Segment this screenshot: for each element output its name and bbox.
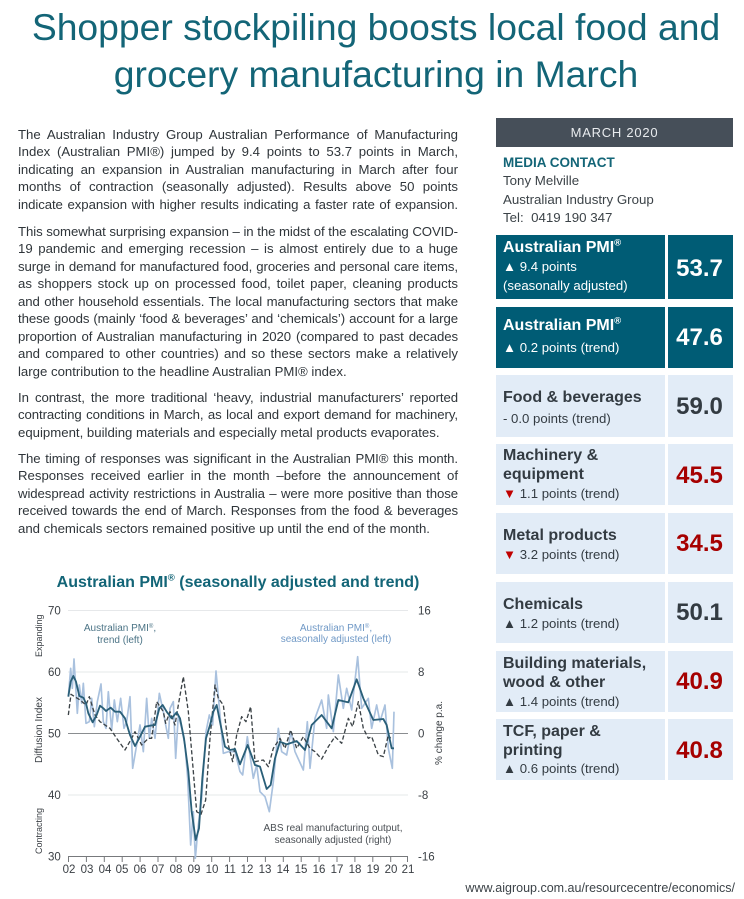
text block: stockpiling paragraph: and other household essentials. The local manufacturing sectors that make	[18, 294, 458, 309]
media contact: Tony Melville	[503, 173, 579, 188]
axis labels: 19	[367, 864, 379, 876]
text block: timing paragraph: received towards the end of March. Responses from the food & beverages	[18, 503, 458, 518]
panel: Australian PMI seasonally adjusted: ▲ 9.4 points	[503, 259, 577, 274]
series labels: ,	[153, 623, 156, 634]
text block: stockpiling paragraph	[18, 224, 458, 378]
axis labels: 14	[277, 864, 290, 876]
value: 47.6: 47.6	[676, 324, 723, 351]
panel: Metal products: ▼ 3.2 points (trend)	[503, 547, 619, 562]
title: Shopper stockpiling boosts local food and	[32, 6, 720, 48]
series: seasonally adjusted	[68, 657, 394, 858]
panel: Australian PMI trend: ▲ 0.2 points (trend)	[503, 340, 619, 355]
axis labels: 03	[81, 864, 93, 876]
series labels: ®	[365, 623, 370, 630]
series: trend	[68, 676, 394, 840]
panel: Australian PMI trend	[496, 307, 665, 368]
panel: Machinery & equipment	[496, 444, 665, 505]
date banner	[496, 118, 733, 147]
media contact: MEDIA CONTACT	[503, 155, 615, 170]
axis labels: 70	[48, 606, 61, 618]
panel: Machinery & equipment: Machinery &	[503, 447, 598, 464]
panel: TCF, paper & printing	[496, 719, 665, 780]
axis labels: Expanding	[34, 614, 44, 657]
text block: timing paragraph: The timing of responses was significant in the Australian PMI® this month.	[18, 451, 458, 466]
value: 40.9	[668, 651, 733, 712]
series labels: ABS real manufacturing output,	[264, 823, 402, 834]
series labels	[84, 623, 402, 846]
value: 59.0: 59.0	[676, 393, 723, 420]
axis labels: 0	[418, 728, 424, 740]
text block: intro paragraph: indicate expansion with higher results indicating a faster rate of expansion.	[18, 197, 458, 212]
axis labels: 08	[170, 864, 182, 876]
panel: Chemicals: Chemicals	[503, 596, 583, 613]
text block: heavy industry paragraph	[18, 390, 458, 440]
axis labels: 20	[385, 864, 397, 876]
panel: Machinery & equipment: equipment	[503, 466, 584, 483]
axis labels: 09	[188, 864, 200, 876]
axis labels	[34, 606, 445, 876]
panel: Building materials, wood & other: ▲ 1.4 points (trend)	[503, 694, 619, 709]
text block: stockpiling paragraph: these goods (mainly ‘food & beverages’ and ‘chemicals’) account for a large	[18, 311, 458, 326]
text block: stockpiling paragraph: as shoppers stock up on processed food, toilet paper, cleaning products	[18, 276, 458, 291]
text block: intro paragraph: The Australian Industry Group Australian Performance of Manufacturing	[18, 127, 458, 142]
series labels: Australian PMI	[84, 623, 149, 634]
text block: stockpiling paragraph: large contribution to the headline Australian PMI® index.	[18, 364, 347, 378]
axis labels: 16	[418, 606, 431, 618]
value: 53.7	[668, 235, 733, 299]
panel: Building materials, wood & other: wood & other	[503, 674, 605, 691]
panel: TCF, paper & printing: ▲ 0.6 points (trend)	[503, 761, 619, 776]
chart heading: Australian PMI® (seasonally adjusted and trend)	[57, 573, 419, 591]
series labels: Australian PMI	[300, 623, 365, 634]
axis labels: 06	[134, 864, 146, 876]
text block: heavy industry paragraph: equipment, building materials and especially metal products evaporates.	[18, 425, 440, 440]
panel: Food & beverages	[496, 375, 665, 437]
footer URL: www.aigroup.com.au/resourcecentre/economics/	[465, 881, 735, 895]
media contact: Tel: 0419 190 347	[503, 210, 612, 225]
text block: intro paragraph: indicating an expansion in Australian manufacturing in March after four	[18, 162, 458, 177]
value: 40.9: 40.9	[676, 668, 723, 695]
series labels: seasonally adjusted (right)	[275, 835, 391, 846]
series labels: ,	[369, 623, 372, 634]
panel: Chemicals	[496, 582, 665, 643]
axis labels: 10	[206, 864, 218, 876]
value: 45.5	[668, 444, 733, 505]
text block: intro paragraph	[18, 127, 458, 212]
value: 50.1: 50.1	[676, 599, 723, 626]
axis labels: 12	[241, 864, 253, 876]
text block: stockpiling paragraph: and compared to other countries) and so these sectors make a relatively	[18, 346, 458, 361]
value: 34.5: 34.5	[676, 530, 723, 557]
panel: Building materials, wood & other: Building materials,	[503, 655, 646, 672]
axis labels: 05	[116, 864, 128, 876]
value: 50.1	[668, 582, 733, 643]
text block: stockpiling paragraph: 19 pandemic and emerging recession – is almost entirely due to a huge	[18, 241, 458, 256]
axis labels: 60	[48, 667, 61, 679]
media contact	[503, 155, 654, 225]
panel: Food & beverages: - 0.0 points (trend)	[503, 411, 611, 426]
series labels: seasonally adjusted (left)	[281, 634, 391, 645]
series labels: ®	[149, 623, 154, 630]
text block: stockpiling paragraph: proportion of Australian manufacturing in 2020 (compared to past decades	[18, 329, 458, 344]
panel: Chemicals: ▲ 1.2 points (trend)	[503, 616, 619, 631]
panel: Food & beverages: Food & beverages	[503, 389, 642, 406]
panel: Building materials, wood & other	[496, 651, 665, 712]
value: 47.6	[668, 307, 733, 368]
value: 40.8	[668, 719, 733, 780]
value: 59.0	[668, 375, 733, 437]
axis labels: 30	[48, 852, 61, 864]
line chart: Australian PMI and ABS output	[34, 606, 445, 876]
axis labels: -16	[418, 852, 435, 864]
panel: Australian PMI trend: Australian PMI®	[503, 316, 621, 334]
text block: heavy industry paragraph: In contrast, the more traditional ‘heavy, industrial manufacturers’ reported	[18, 390, 458, 405]
text block: intro paragraph: months of contraction (seasonally adjusted). Results above 50 points	[18, 179, 458, 194]
text block: timing paragraph	[18, 451, 458, 536]
axis labels: 17	[331, 864, 343, 876]
axis labels: 8	[418, 667, 424, 679]
panel: Metal products	[496, 513, 665, 574]
axis labels: % change p.a.	[434, 701, 445, 765]
media contact: Australian Industry Group	[503, 192, 654, 207]
panel: Australian PMI seasonally adjusted: Australian PMI®	[503, 238, 621, 256]
series: ABS output	[68, 677, 391, 814]
axis labels: 13	[259, 864, 271, 876]
axis labels: 21	[402, 864, 414, 876]
title: grocery manufacturing in March	[114, 53, 638, 95]
axis labels: -8	[418, 790, 428, 802]
axis labels: 04	[99, 864, 112, 876]
series labels: trend (left)	[97, 635, 143, 646]
axis labels: 40	[48, 790, 61, 802]
axis labels: 18	[349, 864, 361, 876]
text block: stockpiling paragraph: This somewhat surprising expansion – in the midst of the escalating COVID-	[18, 224, 458, 239]
value: 53.7: 53.7	[676, 255, 723, 282]
panel: Australian PMI seasonally adjusted: (seasonally adjusted)	[503, 278, 628, 293]
axis labels: 11	[224, 864, 236, 876]
axis labels: 50	[48, 728, 61, 740]
axis labels: Contracting	[34, 808, 44, 854]
value: 40.8: 40.8	[676, 737, 723, 764]
panel: Metal products: Metal products	[503, 527, 617, 544]
title	[32, 6, 720, 95]
axis labels: 16	[313, 864, 325, 876]
value: 34.5	[668, 513, 733, 574]
panel: TCF, paper & printing: printing	[503, 742, 563, 759]
text block: timing paragraph: Responses received earlier in the month –before the announcement of	[18, 468, 458, 483]
date banner: MARCH 2020	[571, 125, 658, 140]
text block: stockpiling paragraph: surge in demand for manufactured food, groceries and personal care items,	[18, 259, 458, 274]
panel: Machinery & equipment: ▼ 1.1 points (trend)	[503, 486, 619, 501]
text block: timing paragraph: widespread activity restrictions in Australia – were more positive than those	[18, 486, 458, 501]
axis labels: 15	[295, 864, 307, 876]
text block: intro paragraph: Index (Australian PMI®) jumped by 9.4 points to 53.7 points in March,	[18, 144, 458, 159]
text block: timing paragraph: and chemicals sectors remained positive up until the end of the month.	[18, 521, 430, 536]
value: 45.5: 45.5	[676, 462, 723, 489]
axis labels: Diffusion Index	[34, 697, 45, 763]
axis labels: 07	[152, 864, 164, 876]
panel: TCF, paper & printing: TCF, paper &	[503, 723, 601, 740]
axis labels: 02	[63, 864, 75, 876]
panel: Australian PMI seasonally adjusted	[496, 235, 665, 299]
text block: heavy industry paragraph: contracting conditions in March, as local and export demand for machinery,	[18, 407, 458, 422]
